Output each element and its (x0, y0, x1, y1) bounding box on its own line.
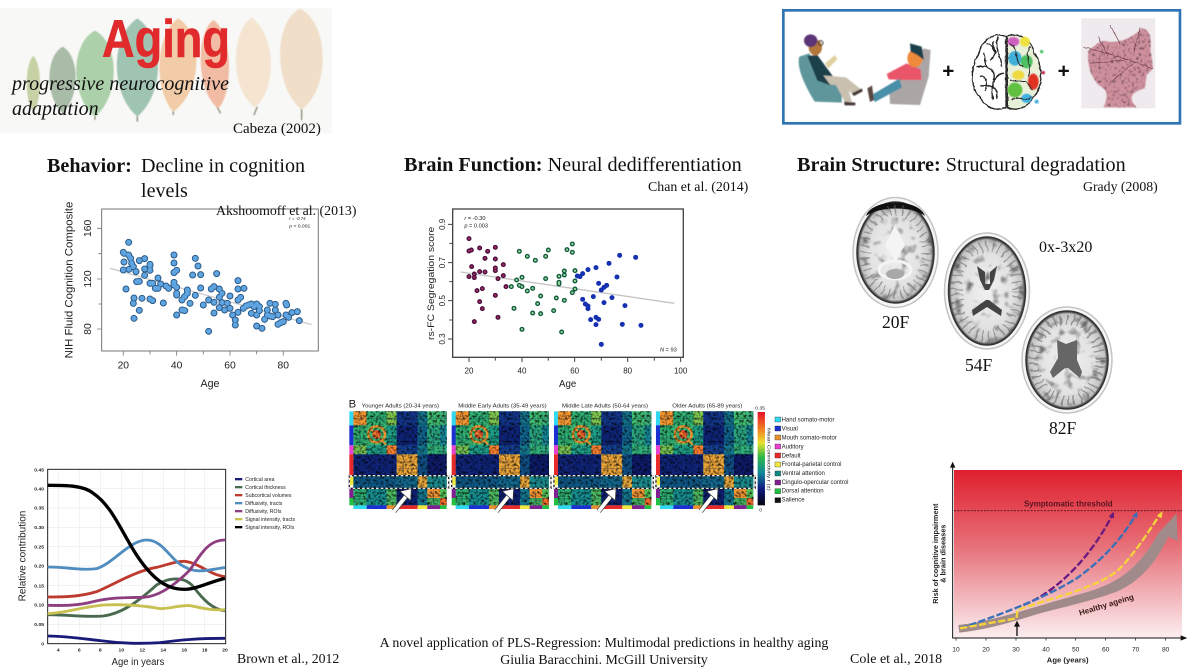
icon: patient reclining (867, 43, 931, 105)
legend: Cortical area (245, 477, 275, 483)
axis labels: 100 (674, 367, 688, 376)
icon: therapist in chair (799, 34, 863, 105)
axis labels: 60 (224, 360, 236, 371)
axis ticks and titles: Relative contribution (18, 511, 29, 601)
legend: Diffusivity, ROIs (245, 509, 282, 515)
banner: Aging title with leaves (0, 8, 332, 137)
axis ticks and titles: 12 (140, 647, 145, 653)
legend: Subcortical volumes (245, 493, 292, 499)
axis ticks and titles: 0.35 (34, 506, 44, 512)
axis ticks and titles: 16 (182, 647, 187, 653)
axis labels: 40 (171, 360, 183, 371)
legend: Diffusivity, tracts (245, 501, 283, 507)
axes (931, 462, 1187, 664)
axis ticks and titles: 20 (222, 647, 228, 653)
footer: talk title and author (380, 636, 828, 668)
older points (577, 255, 641, 344)
footer: talk title and author: Giulia Baracchini. McGill University (500, 653, 708, 668)
axis ticks and titles (18, 467, 228, 668)
matrix: middle early adults: Middle Early Adults (35-49 years) (458, 403, 547, 409)
axis labels: 20 (118, 360, 129, 371)
legend: networks: Visual (782, 426, 798, 432)
axis ticks and titles: 0.40 (34, 486, 44, 492)
axis labels: r = -0.74 (289, 216, 306, 221)
axis ticks and titles: 0.05 (34, 622, 44, 628)
axes: 20 (982, 647, 990, 654)
axes: 70 (1132, 647, 1140, 654)
heading: Brain Structure: Brain Structure: Structural degradation (797, 154, 1126, 176)
legend: networks: Mouth somato-motor (782, 435, 837, 441)
axis labels: 0.9 (438, 218, 447, 230)
axis ticks and titles: 0.15 (34, 583, 44, 589)
axis ticks and titles: 6 (78, 647, 81, 653)
axis ticks and titles: 0.10 (34, 603, 44, 609)
axis ticks and titles: 0 (41, 641, 44, 647)
footer: talk title and author: A novel application of PLS-Regression: Multimodal predictions in healthy aging (380, 636, 828, 651)
plus sign: + (1058, 59, 1070, 82)
axes: 40 (1042, 647, 1050, 654)
citation: Brown: Brown et al., 2012 (237, 651, 339, 666)
chart: NIH fluid cognition scatter plot (64, 202, 318, 390)
MRI: 20F (853, 198, 938, 332)
axis ticks and titles: 18 (202, 647, 208, 653)
citation: Cole: Cole et al., 2018 (850, 652, 942, 667)
colour bar (755, 405, 771, 513)
axes: 80 (1162, 647, 1170, 654)
legend: networks: Dorsal attention (782, 489, 824, 495)
heading: Behavior: levels (141, 180, 188, 202)
axis ticks and titles: 0.25 (34, 544, 44, 550)
citation: Chan: Chan et al. (2014) (648, 180, 749, 195)
citation: Akshoomoff: Akshoomoff et al. (2013) (216, 203, 356, 219)
axes: 30 (1012, 647, 1020, 654)
title: Aging: Aging (102, 10, 230, 69)
trajectories (960, 514, 1160, 628)
axis ticks and titles: 0.30 (34, 525, 44, 531)
citation: Grady: Grady (2008) (1083, 179, 1158, 195)
matrix: middle early adults (452, 403, 551, 511)
heading: Behavior (47, 155, 305, 202)
axis labels: 0.3 (438, 333, 447, 345)
axis ticks and titles: 8 (99, 647, 102, 653)
axis ticks and titles: 0.20 (34, 564, 44, 570)
axis labels: p < 0.001 (288, 223, 310, 229)
axis ticks and titles: 4 (57, 647, 60, 653)
axis labels (64, 202, 310, 390)
axis labels: N = 93 (660, 348, 677, 354)
MRI: 82F (1022, 307, 1112, 438)
chart: risk of cognitive impairment over age (931, 462, 1187, 664)
axis labels: 80 (623, 367, 633, 376)
heading: Behavior: Behavior: (47, 155, 132, 177)
heading: Behavior: Decline in cognition (141, 155, 305, 177)
axis labels: Age (200, 378, 220, 390)
healthy ageing band (958, 513, 1178, 633)
middle-aged points (511, 244, 575, 332)
chart: relative contribution line chart (18, 467, 296, 668)
data points (123, 242, 299, 331)
matrix: middle late adults: Middle Late Adults (50-64 years) (562, 403, 648, 409)
label: 54F (965, 355, 992, 375)
axis ticks and titles: Age in years (112, 657, 164, 668)
panel: therapy, brain and silhouette icons (783, 10, 1180, 123)
axis labels: 80 (278, 360, 289, 371)
axis ticks and titles: 10 (119, 647, 124, 653)
matrix: younger adults: Younger Adults (20-34 years) (362, 403, 439, 409)
icon: tree-branch head silhouette (1081, 18, 1155, 108)
axes: 60 (1102, 647, 1110, 654)
icon: brain half line art half colourful (972, 35, 1045, 109)
data lines (48, 485, 225, 643)
axis labels: p = 0.003 (463, 224, 488, 230)
legend (235, 477, 296, 531)
legend: networks: Cingulo-opercular control (782, 480, 848, 486)
legend: networks (775, 417, 848, 504)
panel letter: B (349, 399, 356, 411)
legend: networks: Salience (782, 498, 805, 504)
legend: networks: Auditory (782, 444, 804, 450)
matrix: older adults (656, 403, 755, 511)
chart: rs-FC segregation scatter plot (426, 209, 688, 390)
subtitle: adaptation (12, 98, 99, 120)
colour bar: 0.35 (755, 405, 765, 411)
heading: Brain Function: Brain Function: Neural dedifferentiation (404, 154, 742, 176)
matrix: middle late adults (554, 403, 653, 511)
citation: Cabeza: Cabeza (2002) (233, 121, 321, 137)
colour bar: 0 (759, 507, 762, 513)
axis labels: 40 (518, 367, 527, 376)
legend: Cortical thickness (245, 485, 286, 491)
axis labels: 0.7 (438, 257, 447, 268)
axis labels: rs-FC Segregation score (426, 227, 436, 340)
axis labels: 20 (465, 367, 474, 376)
axes: & brain diseases (939, 525, 948, 583)
axes: Age (years) (1047, 655, 1089, 664)
axis ticks and titles: 0.45 (34, 467, 44, 473)
axis labels: 0.5 (438, 295, 447, 306)
younger points (469, 239, 506, 322)
annotation: scan code: 0x-3x20 (1039, 239, 1092, 256)
legend: networks: Ventral attention (782, 471, 825, 477)
axis labels: NIH Fluid Cognition Composite (64, 202, 76, 358)
panel: connectivity matrices by age group (349, 399, 848, 513)
label: 82F (1049, 418, 1076, 438)
axis labels: 60 (570, 367, 580, 376)
axis labels: 160 (83, 219, 94, 237)
leaves image (0, 8, 332, 133)
legend: networks: Default (782, 453, 801, 459)
MRI: 54F (944, 233, 1030, 375)
axis labels: Age (559, 379, 576, 390)
subtitle: progressive neurocognitive (10, 73, 229, 95)
legend: Signal intensity, tracts (245, 517, 296, 523)
axis labels: r = -0.30 (464, 216, 486, 222)
axis labels: 80 (83, 323, 94, 335)
plus sign: + (942, 59, 954, 82)
matrix: younger adults (349, 403, 449, 511)
panel: brain MRI scans by age (853, 198, 1112, 438)
axis labels (426, 216, 688, 390)
label: 20F (882, 312, 910, 332)
matrix: older adults: Older Adults (65-89 years) (672, 403, 743, 409)
legend: Signal intensity, ROIs (245, 525, 295, 531)
healthy ageing label: Healthy ageing (1078, 592, 1135, 618)
axis ticks and titles: 14 (161, 647, 166, 653)
colour bar: Mean Connectivity r (z) (765, 428, 771, 491)
threshold label: Symptomatic threshold (1024, 499, 1113, 508)
axes: Risk of cognitive impairment (931, 503, 940, 604)
axis labels: 120 (83, 270, 94, 288)
legend: networks: Hand somato-motor (782, 418, 835, 424)
axes: 50 (1072, 647, 1080, 654)
legend: networks: Frontal-parietal control (782, 462, 841, 468)
axes: 10 (952, 647, 960, 654)
